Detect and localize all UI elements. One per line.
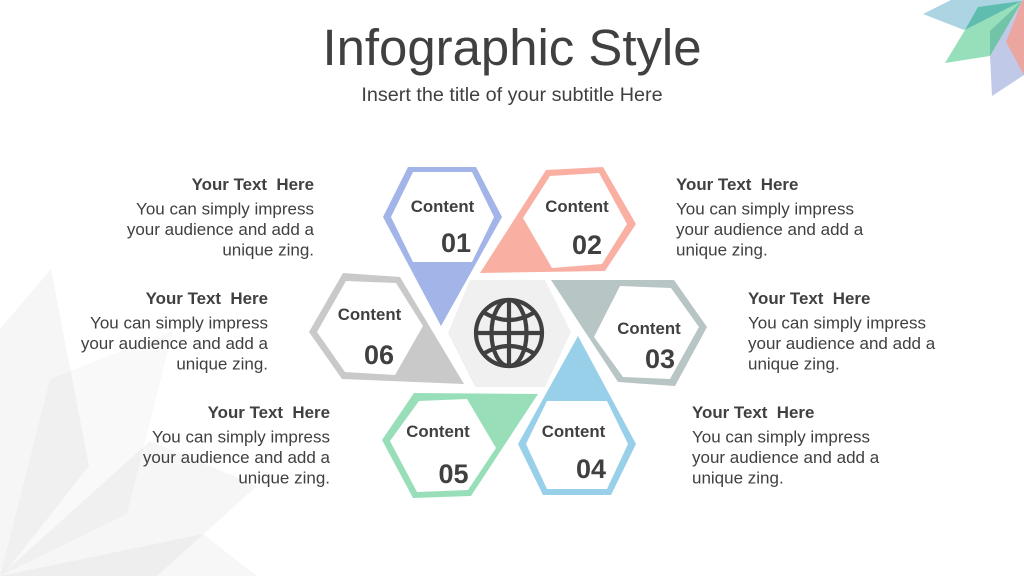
- text block: item 01: unique zing.: [222, 240, 314, 260]
- subtitle: Insert the title of your subtitle Here: [361, 84, 663, 106]
- hexagon 01: [383, 167, 502, 326]
- text block: item 03: [748, 289, 936, 374]
- text block: item 05: your audience and add a: [143, 448, 331, 467]
- text block: item 06: Your Text Here: [146, 289, 268, 308]
- text block: item 02: unique zing.: [676, 240, 768, 260]
- hexagon 02: Content: [545, 197, 609, 216]
- text block: item 02: You can simply impress: [676, 200, 854, 218]
- text block: item 01: [127, 175, 315, 260]
- text block: item 06: unique zing.: [176, 354, 268, 374]
- text block: item 04: You can simply impress: [692, 428, 870, 446]
- text block: item 02: Your Text Here: [676, 175, 798, 194]
- hexagon 03: [551, 280, 707, 386]
- text block: item 03: Your Text Here: [748, 289, 870, 308]
- hexagon 01: Content: [411, 197, 475, 216]
- text block: item 05: You can simply impress: [152, 428, 330, 446]
- text block: item 04: Your Text Here: [692, 403, 814, 422]
- hexagon 06: Content: [338, 305, 402, 324]
- text block: item 06: You can simply impress: [90, 314, 268, 332]
- hexagon 02: 02: [572, 230, 602, 260]
- hexagon 01: 01: [441, 228, 471, 258]
- hexagon 04: Content: [542, 422, 606, 441]
- background decoration: grey polygons bottom left: [0, 269, 257, 576]
- text block: item 02: [676, 175, 864, 260]
- text block: item 03: You can simply impress: [748, 314, 926, 332]
- text block: item 03: your audience and add a: [748, 334, 936, 353]
- decoration: coloured leaves top right: [923, 0, 1024, 96]
- title: Infographic Style: [322, 19, 702, 76]
- text block: item 03: unique zing.: [748, 354, 840, 374]
- hexagon 05: 05: [438, 459, 469, 489]
- text block: item 05: [143, 403, 331, 488]
- hexagon 05: [382, 393, 538, 498]
- text block: item 06: your audience and add a: [81, 334, 269, 353]
- text block: item 01: You can simply impress: [136, 200, 314, 218]
- hexagon 03: Content: [617, 319, 681, 338]
- hexagon 02: [480, 167, 636, 273]
- hexagon 06: 06: [364, 340, 394, 370]
- text block: item 06: [81, 289, 269, 374]
- hexagon 04: [518, 336, 636, 495]
- hexagon 05: Content: [406, 422, 470, 441]
- hexagon 04: 04: [576, 454, 606, 484]
- text block: item 05: unique zing.: [238, 468, 330, 488]
- text block: item 02: your audience and add a: [676, 220, 864, 239]
- hexagon 06: [309, 273, 464, 384]
- text block: item 01: your audience and add a: [127, 220, 315, 239]
- text block: item 01: Your Text Here: [192, 175, 314, 194]
- text block: item 04: [692, 403, 880, 488]
- icon: globe: [476, 300, 542, 366]
- text block: item 05: Your Text Here: [208, 403, 330, 422]
- center hexagon: [448, 280, 571, 387]
- text block: item 04: unique zing.: [692, 468, 784, 488]
- text block: item 04: your audience and add a: [692, 448, 880, 467]
- hexagon 03: 03: [645, 344, 675, 374]
